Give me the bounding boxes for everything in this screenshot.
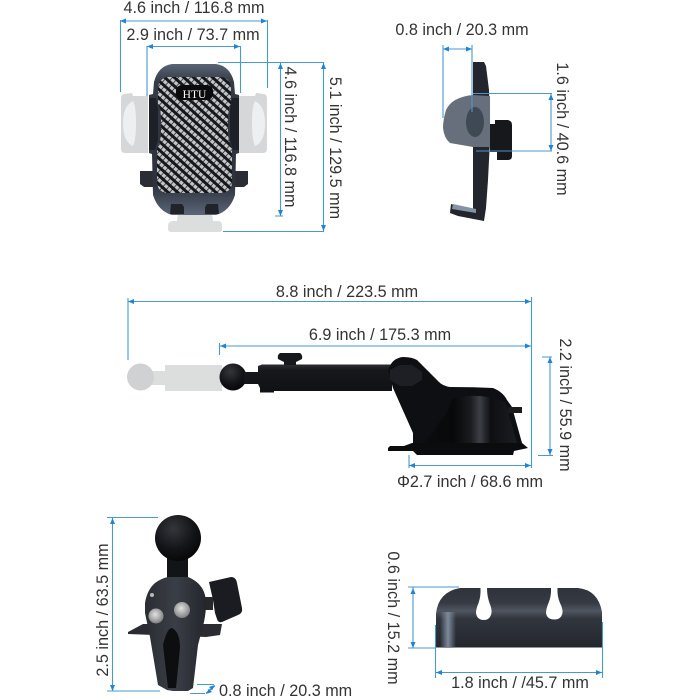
icon: HTU badge: [176, 85, 213, 101]
icon: rotary knob: [209, 577, 242, 622]
text: depth: 0.8 inch / 20.3 mm: [395, 21, 529, 39]
icon: side grips: [149, 98, 239, 150]
icon: gray clip: [443, 95, 490, 147]
icon: metal screws: [148, 593, 190, 624]
icon: cable slot left: [476, 588, 492, 620]
icon: HTU badge: HTU: [183, 89, 207, 101]
panel: phone holder side view: [443, 62, 512, 221]
text: clamp height: 1.6 inch / 40.6 mm: [553, 62, 571, 196]
icon: carbon fibre panel: [157, 77, 232, 193]
icon: clip flat bar: [128, 624, 222, 637]
icon: bottom foot: [450, 204, 484, 221]
panel: vent clip: [128, 515, 242, 691]
text: clip height: 2.5 inch / 63.5 mm: [94, 543, 112, 677]
icon: bottom feet: [170, 204, 219, 214]
icon: clip jaw gap: [163, 628, 180, 688]
dimensions: front view: [120, 0, 344, 232]
icon: side tab: [508, 407, 522, 413]
icon: arm: [244, 364, 392, 392]
icon: suction base body: [388, 357, 522, 443]
text: inner width: 2.9 inch / 73.7 mm: [126, 26, 260, 44]
icon: arm knob: [278, 353, 302, 365]
icon: ball head: [155, 515, 201, 561]
icon: holder body: [149, 64, 239, 215]
icon: black ball joint: [220, 364, 246, 390]
dimension lines: [107, 518, 215, 694]
icon: ghosted extended arms: [121, 93, 267, 232]
panel: cable organizer: [436, 588, 602, 648]
icon: adjustment knob: [490, 120, 512, 160]
dimension lines: [408, 587, 602, 678]
icon: clip body: [145, 577, 206, 691]
icon: ghosted extended arm: [127, 364, 222, 391]
dimensions: cable organizer: [384, 551, 602, 692]
icon: cable slot right: [546, 588, 563, 620]
dimension lines: [443, 45, 554, 151]
icon: left highlight: [440, 612, 456, 648]
text: base height: 2.2 inch / 55.9 mm: [556, 338, 574, 472]
dimensions: vent clip: [94, 518, 352, 700]
icon: ball neck: [167, 555, 188, 581]
icon: suction cup: [424, 396, 517, 443]
dimension lines: [128, 297, 553, 468]
icon: pivot hub: [390, 365, 422, 386]
text: extended length: 8.8 inch / 223.5 mm: [276, 283, 418, 301]
panel: phone holder front view: [121, 64, 267, 232]
text: overall height: 5.1 inch / 129.5 mm: [326, 77, 344, 219]
text: retracted length: 6.9 inch / 175.3 mm: [309, 326, 451, 344]
text: clip width: 0.8 inch / 20.3 mm: [219, 682, 352, 700]
icon: knob stem: [202, 597, 213, 610]
dimension lines: [120, 18, 326, 232]
icon: holder wings: [140, 171, 248, 187]
dimensions: side view: [395, 21, 571, 196]
text: inner height: 4.6 inch / 116.8 mm: [281, 67, 299, 207]
text: base diameter: Φ2.7 inch / 68.6 mm: [397, 473, 543, 491]
icon: side body: [473, 62, 490, 221]
icon: base plate: [388, 443, 528, 455]
text: organizer height: 0.6 inch / 15.2 mm: [384, 551, 402, 685]
panel: telescopic arm and suction base: [127, 353, 528, 455]
text: organizer width: 1.8 inch / /45.7 mm: [451, 674, 589, 692]
dimensions: arm view: [128, 283, 574, 491]
